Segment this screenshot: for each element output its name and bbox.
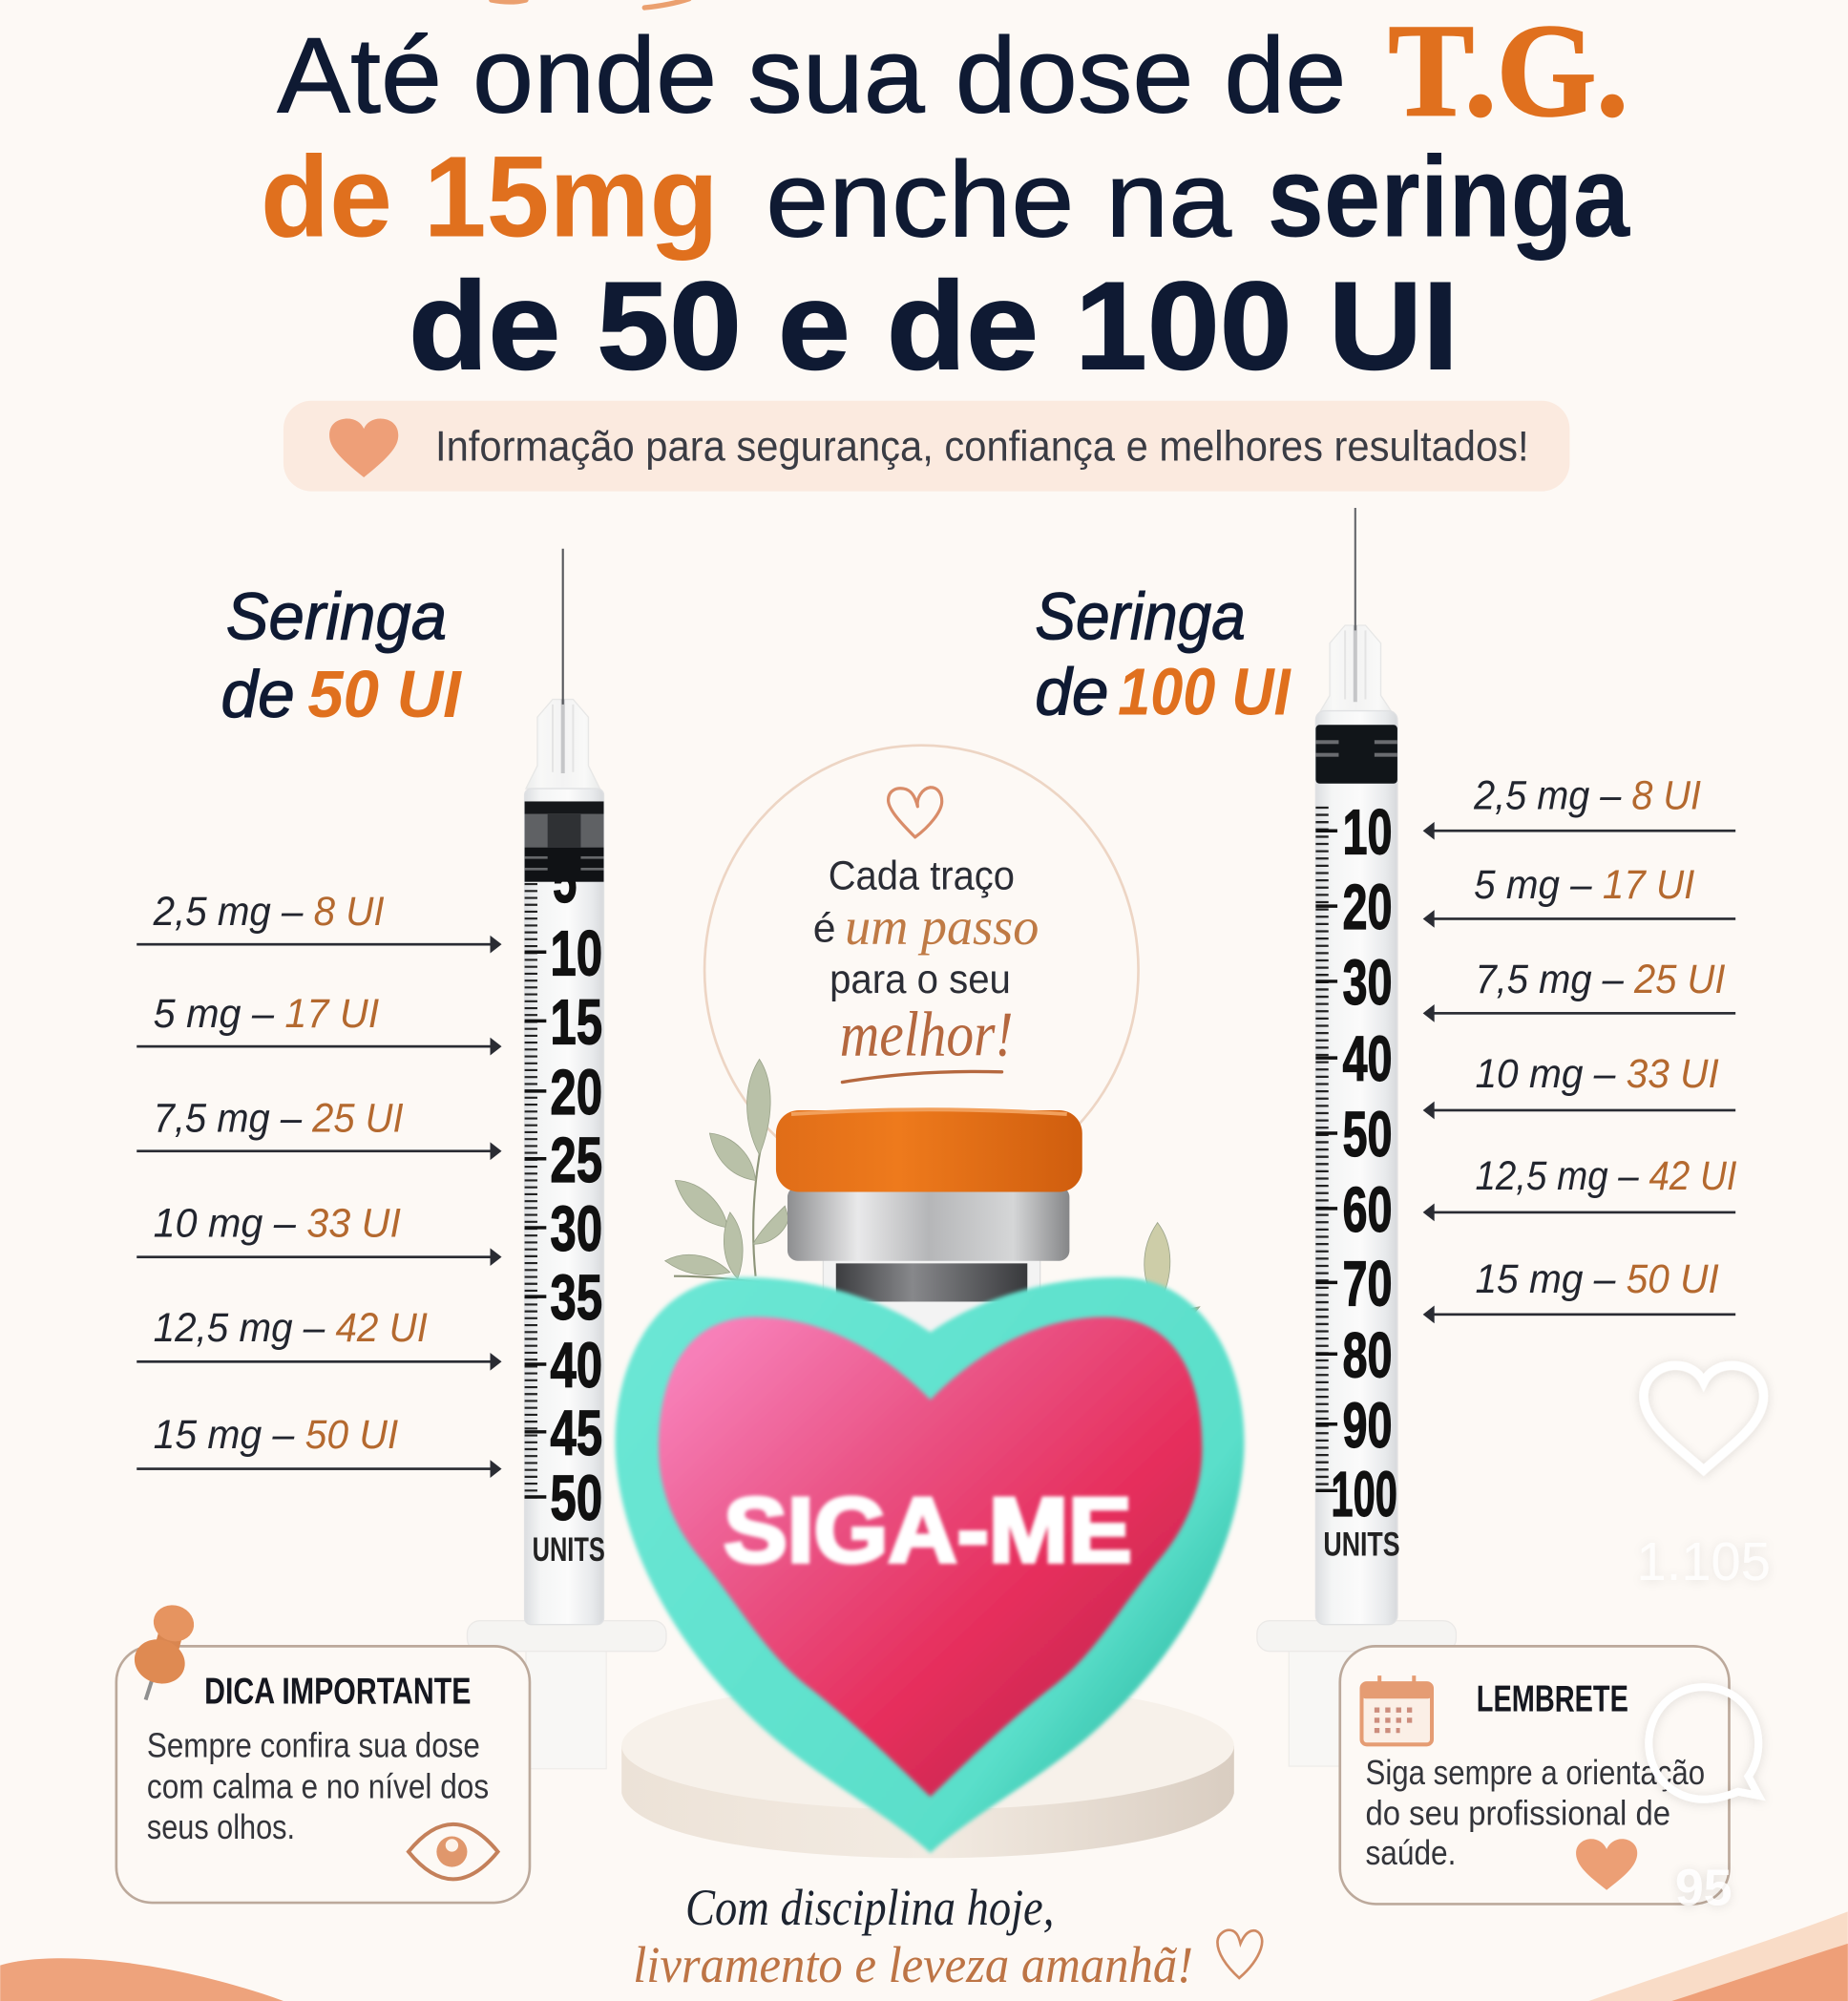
speech bubble message: melhor!: [840, 999, 1014, 1069]
heading: seringa 50: [220, 579, 462, 731]
partial number: 5: [553, 846, 577, 916]
follow heart: [616, 1277, 1245, 1853]
card: lembrete: do seu profissional de: [1366, 1794, 1670, 1833]
title: de 15mg: [261, 133, 719, 261]
icon: comment bubble: [1648, 1687, 1758, 1800]
overlay: social counters: 1.105: [1637, 1531, 1771, 1591]
dose labels right: [1423, 772, 1737, 1323]
icon: heart: [329, 418, 398, 477]
needle: [1354, 508, 1356, 630]
dose labels left: [136, 889, 502, 1478]
dose labels left: 5 mg – 17 UI: [154, 991, 379, 1037]
dose labels right: 10 mg – 33 UI: [1475, 1051, 1719, 1097]
subtitle pill: Informação para segurança, confiança e melhores resultados!: [435, 424, 1529, 471]
title: Até onde sua dose de: [277, 15, 1346, 136]
speech bubble message: [704, 746, 1139, 1194]
overlay: social counters: [1637, 1365, 1771, 1917]
barrel: [1315, 711, 1397, 1625]
scale numbers: [1331, 797, 1397, 1530]
syringe 100 UI: UNITS: [1323, 1527, 1400, 1563]
scale numbers: 20: [550, 1058, 602, 1128]
scale numbers: 20: [1342, 873, 1393, 943]
vial: [776, 1109, 1082, 1359]
scale numbers: 70: [1342, 1249, 1393, 1319]
overlay: social counters: 95: [1675, 1861, 1732, 1917]
card: lembrete: saúde.: [1366, 1833, 1456, 1872]
plunger: [1315, 725, 1397, 784]
card: dica importante: Sempre confira sua dose: [147, 1726, 480, 1765]
dose labels left: 7,5 mg – 25 UI: [154, 1096, 404, 1142]
speech bubble message: Cada traço: [829, 853, 1015, 899]
card: dica importante: [116, 1600, 530, 1903]
flange and plunger rod: [467, 1621, 666, 1769]
heading: seringa 100: [1035, 579, 1292, 729]
scale numbers: 10: [1342, 797, 1393, 868]
title: de 50 e de 100 UI: [409, 255, 1459, 395]
scale numbers: 50: [550, 1464, 602, 1534]
scale numbers: 45: [550, 1399, 602, 1469]
underline: [842, 1071, 1002, 1083]
scale numbers: 10: [550, 918, 602, 989]
bottom corner wave left: [0, 1958, 284, 2001]
scale numbers: 100: [1331, 1460, 1397, 1530]
icon: eye: [409, 1824, 498, 1879]
top flourish: [492, 0, 689, 8]
dose labels left: 15 mg – 50 UI: [154, 1412, 398, 1458]
closing message: livramento e leveza amanhã!: [633, 1936, 1193, 1993]
icon: calendar: [1361, 1675, 1432, 1744]
dose labels right: 5 mg – 17 UI: [1474, 862, 1694, 908]
title: seringa: [1268, 133, 1630, 261]
title: enche na: [766, 138, 1232, 259]
leaves: [665, 1059, 1200, 1330]
icon: outline heart: [1217, 1930, 1262, 1978]
scale numbers: 15: [550, 987, 602, 1058]
follow heart: SIGA-ME: [724, 1480, 1132, 1582]
dose labels right: 7,5 mg – 25 UI: [1475, 957, 1726, 1002]
dose labels right: 12,5 mg – 42 UI: [1475, 1153, 1737, 1199]
card: lembrete: LEMBRETE: [1477, 1679, 1628, 1720]
dose labels left: 10 mg – 33 UI: [154, 1200, 401, 1246]
speech bubble message: um passo: [845, 897, 1039, 956]
barrel: [525, 789, 603, 1625]
icon: outline heart: [889, 788, 942, 837]
dose labels left: 12,5 mg – 42 UI: [154, 1305, 428, 1351]
plunger: [525, 801, 603, 882]
scale numbers: 80: [1342, 1320, 1393, 1391]
card: dica importante: seus olhos.: [147, 1807, 295, 1846]
heading: seringa 100: de: [1035, 655, 1109, 729]
scale numbers: 35: [550, 1263, 602, 1334]
dose labels left: 2,5 mg – 8 UI: [153, 889, 385, 935]
tick marks: [1317, 807, 1327, 1486]
arrows: [1423, 822, 1735, 1323]
scale numbers: [550, 918, 602, 1534]
bottom corner wave right: [1588, 1911, 1848, 2001]
flange and plunger rod: [1257, 1621, 1456, 1766]
scale numbers: 50: [1342, 1100, 1393, 1170]
syringe 100 UI: [1257, 508, 1456, 1766]
scale numbers: 60: [1342, 1175, 1393, 1246]
icon: pushpin: [129, 1600, 199, 1700]
heading: seringa 50: de: [220, 657, 295, 731]
card: dica importante: com calma e no nível dos: [147, 1766, 489, 1805]
dose labels right: 15 mg – 50 UI: [1475, 1256, 1719, 1302]
card: dica importante: DICA IMPORTANTE: [204, 1672, 471, 1713]
card: lembrete: Siga sempre a orientação: [1366, 1753, 1705, 1792]
speech bubble message: é: [813, 906, 836, 952]
tick marks: [526, 883, 536, 1500]
scale numbers: 30: [550, 1194, 602, 1265]
syringe 50 UI: [467, 549, 666, 1769]
scale numbers: 25: [550, 1126, 602, 1196]
closing message: Com disciplina hoje,: [685, 1879, 1054, 1936]
hub: [526, 700, 599, 789]
hub: [1318, 625, 1394, 715]
subtitle pill: [284, 401, 1569, 492]
title: [261, 0, 1630, 395]
card: lembrete: [1340, 1646, 1729, 1904]
scale numbers: 40: [1342, 1024, 1393, 1095]
icon: heart: [1576, 1839, 1637, 1890]
closing message: [633, 1879, 1262, 1993]
dose labels right: 2,5 mg – 8 UI: [1473, 772, 1701, 818]
speech bubble message: para o seu: [830, 957, 1011, 1002]
scale numbers: 40: [550, 1331, 602, 1401]
scale numbers: 30: [1342, 948, 1393, 1019]
heading: seringa 50: Seringa: [226, 579, 447, 654]
scale numbers: 90: [1342, 1391, 1393, 1462]
heading: seringa 100: Seringa: [1035, 579, 1246, 654]
heading: seringa 50: 50 UI: [307, 657, 462, 731]
podium: [621, 1682, 1234, 1858]
needle: [562, 549, 564, 705]
icon: like heart: [1644, 1365, 1764, 1470]
syringe 50 UI: UNITS: [533, 1532, 605, 1569]
title: T.G.: [1389, 0, 1628, 144]
heading: seringa 100: 100 UI: [1118, 655, 1292, 729]
arrows: [136, 936, 502, 1478]
